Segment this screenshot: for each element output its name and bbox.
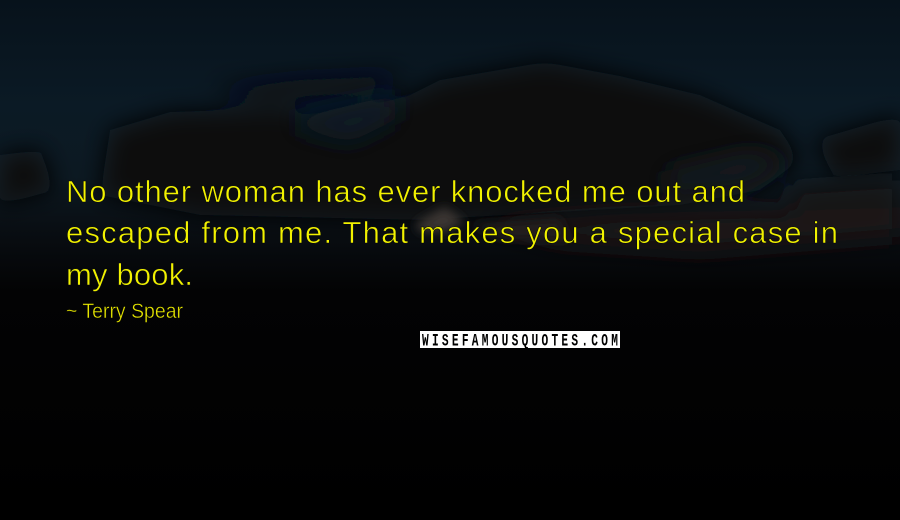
quote line 3: my book. [66,257,193,292]
author attribution: ~ Terry Spear [66,300,183,323]
watermark: wisefamousquotes.com: WISEFAMOUSQUOTES.COM [422,332,618,352]
quote text [66,174,838,292]
quote line 2: escaped from me. That makes you a special case in [66,215,838,250]
quote line 1: No other woman has ever knocked me out and [66,174,745,209]
